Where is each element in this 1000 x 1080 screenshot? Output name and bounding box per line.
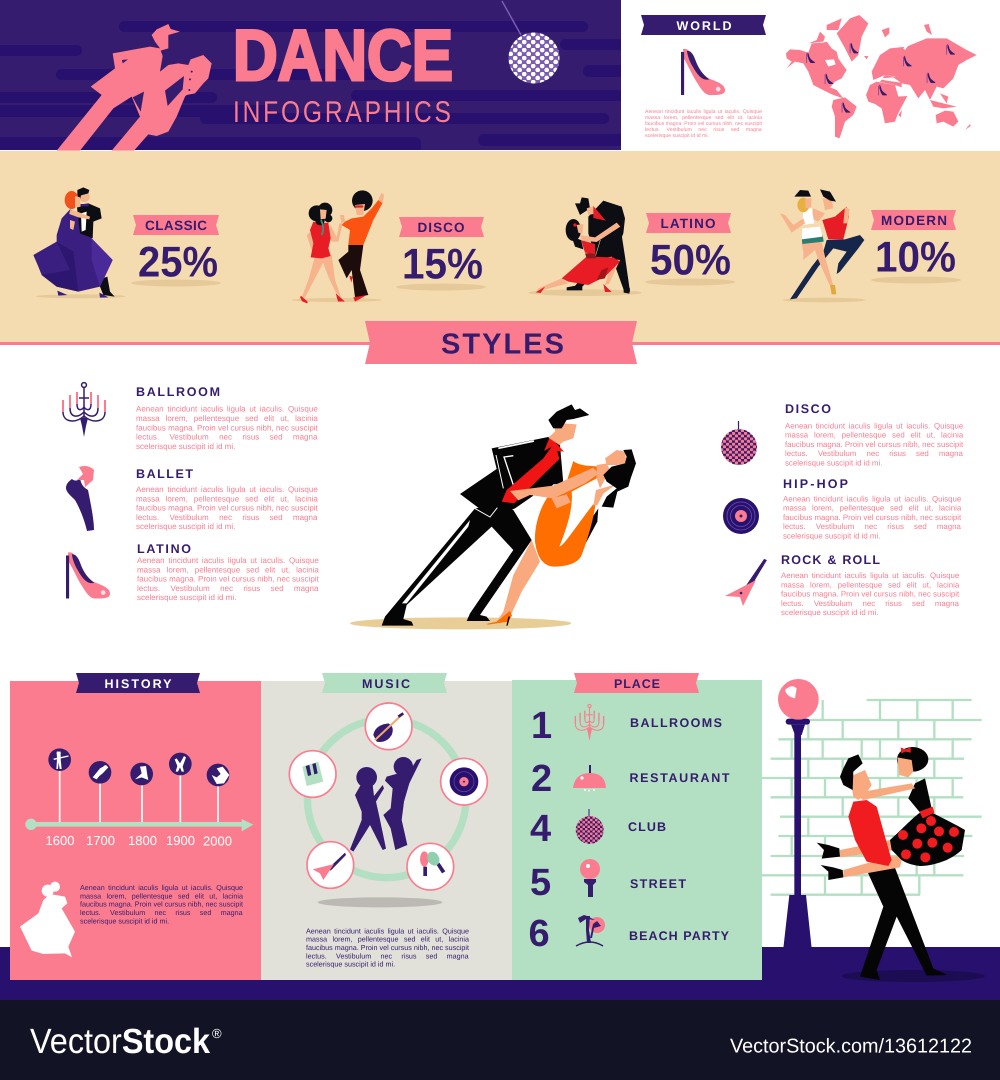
history text: faucibus magna. Proin vel cursus nibh, nec suscipit — [80, 900, 243, 909]
disco text: Aenean tincidunt iaculis ligula ut iaculis. Quisque — [785, 421, 964, 430]
watermark logo: VectorStock — [30, 1022, 210, 1061]
history text — [80, 883, 243, 925]
modern label: 10% — [875, 234, 956, 282]
music text: faucibus magna. Proin vel cursus nibh, nec suscipit — [306, 943, 469, 952]
styles heading ribbon — [365, 321, 637, 364]
hip-hop text: lectus. Vestibulum nec risus sed magna — [783, 522, 961, 531]
ballroom text — [136, 385, 319, 451]
timeline labels: 1800 — [128, 833, 157, 848]
row: restaurant: RESTAURANT — [630, 771, 730, 785]
disco text: faucibus magna. Proin vel cursus nibh, nec suscipit — [785, 440, 964, 449]
disco label — [396, 217, 486, 290]
timeline labels: 1600 — [46, 833, 74, 848]
disco text: DISCO — [785, 402, 831, 416]
illustration: rock and roll couple — [817, 747, 985, 982]
timeline labels: 2000 — [203, 834, 232, 848]
latino text: massa lorem, pellentesque sed elit ut, lacinia — [137, 565, 319, 574]
classic label: CLASSIC — [145, 218, 207, 233]
subtitle: INFOGRAPHICS — [233, 96, 454, 129]
world map — [786, 15, 977, 138]
row: beach party: 6 — [528, 913, 550, 955]
icon: vinyl record — [723, 498, 759, 534]
timeline labels: 1900 — [166, 833, 195, 848]
latino label: LATINO — [660, 216, 716, 231]
history ribbon — [76, 673, 200, 693]
header banner — [0, 0, 633, 157]
panel: style shares band — [0, 151, 1000, 345]
disco label: 15% — [402, 240, 483, 288]
timeline — [25, 748, 253, 831]
hip-hop text: faucibus magna. Proin vel cursus nibh, nec suscipit — [783, 513, 962, 522]
rock and roll text: faucibus magna. Proin vel cursus nibh, nec suscipit — [781, 590, 960, 599]
latino text: faucibus magna. Proin vel cursus nibh, nec suscipit — [137, 575, 320, 584]
brick wall — [762, 700, 982, 895]
panel: music — [261, 673, 512, 980]
row: street: 5 — [530, 862, 551, 904]
disco ball — [502, 1, 560, 84]
disco label: DISCO — [418, 220, 464, 235]
latino text: lectus. Vestibulum nec risus sed magna — [137, 584, 319, 593]
disco text: lectus. Vestibulum nec risus sed magna — [785, 449, 963, 458]
instrument ring diagram — [289, 703, 487, 907]
world text: scelerisque suscipit id id mi. — [645, 133, 709, 139]
figure: disco couple — [292, 190, 384, 303]
hip-hop text — [783, 477, 962, 540]
icon: high heel — [681, 49, 725, 95]
rock and roll text: scelerisque suscipit id id mi. — [781, 608, 878, 617]
rock and roll text: lectus. Vestibulum nec risus sed magna — [781, 599, 959, 608]
ballet text: lectus. Vestibulum nec risus sed magna — [136, 513, 318, 522]
item: ballet — [66, 466, 319, 531]
world text: faucibus magna. Proin vel cursus nibh, nec suscipit — [645, 121, 763, 127]
history text: scelerisque suscipit id id mi. — [80, 916, 169, 925]
music text: lectus. Vestibulum nec risus sed magna — [306, 951, 469, 960]
ground band — [0, 947, 1000, 1000]
figure: latino couple — [528, 197, 642, 296]
rock and roll text — [781, 553, 960, 617]
history text: massa lorem, pellentesque sed elit ut, lacinia — [80, 891, 243, 900]
ballroom text: lectus. Vestibulum nec risus sed magna — [136, 433, 318, 442]
item: ballroom — [62, 383, 319, 451]
world ribbon: WORLD — [676, 19, 732, 33]
ballet text: faucibus magna. Proin vel cursus nibh, nec suscipit — [136, 504, 319, 513]
row: ballrooms — [531, 704, 722, 747]
row: beach party: BEACH PARTY — [629, 929, 730, 943]
panel: place — [512, 673, 762, 980]
rock and roll text: Aenean tincidunt iaculis ligula ut iaculis. Quisque — [781, 571, 960, 580]
ballroom text: Aenean tincidunt iaculis ligula ut iaculis. Quisque — [136, 405, 318, 414]
row: ballrooms: 1 — [531, 705, 552, 747]
ballroom text: scelerisque suscipit id id mi. — [136, 442, 235, 451]
icon: piano keys — [302, 762, 323, 786]
row: street: STREET — [630, 877, 686, 891]
timeline labels: 1700 — [86, 833, 115, 848]
item: disco — [721, 402, 964, 468]
street lamp — [778, 679, 819, 948]
row: street — [530, 859, 686, 904]
ballet text: scelerisque suscipit id id mi. — [136, 522, 235, 531]
ballet text: massa lorem, pellentesque sed elit ut, lacinia — [136, 494, 318, 503]
row: ballrooms: BALLROOMS — [630, 716, 722, 730]
disco text: scelerisque suscipit id id mi. — [785, 458, 882, 468]
latino text — [137, 542, 320, 602]
rock and roll text: massa lorem, pellentesque sed elit ut, lacinia — [781, 580, 960, 589]
music ribbon — [322, 673, 447, 693]
disco text: massa lorem, pellentesque sed elit ut, lacinia — [785, 431, 964, 440]
hip-hop text: HIP-HOP — [783, 477, 848, 491]
row: club: 4 — [530, 808, 551, 850]
modern label: MODERN — [881, 213, 947, 228]
row: restaurant: 2 — [531, 758, 552, 800]
styles heading ribbon: STYLES — [441, 328, 564, 360]
world text — [645, 109, 763, 139]
world text: massa lorem, pellentesque sed elit ut, lacinia — [645, 115, 762, 121]
latino label: 50% — [650, 236, 731, 284]
ballet text: BALLET — [136, 467, 193, 481]
ballroom text: faucibus magna. Proin vel cursus nibh, nec suscipit — [136, 423, 319, 432]
ballroom text: massa lorem, pellentesque sed elit ut, lacinia — [136, 414, 318, 423]
latino text: Aenean tincidunt iaculis ligula ut iaculis. Quisque — [137, 556, 319, 565]
world text: Aenean tincidunt iaculis ligula ut iaculis. Quisque — [645, 109, 762, 115]
modern label — [871, 210, 961, 284]
silhouette couple — [57, 24, 212, 151]
ballet text: Aenean tincidunt iaculis ligula ut iaculis. Quisque — [136, 485, 318, 494]
history text: Aenean tincidunt iaculis ligula ut iaculis. Quisque — [80, 883, 243, 892]
figure: classic couple — [33, 187, 126, 298]
latino text: scelerisque suscipit id id mi. — [137, 593, 236, 602]
icon: maracas — [420, 849, 445, 876]
music ribbon: MUSIC — [362, 677, 410, 691]
ballroom text: BALLROOM — [136, 385, 220, 399]
latino label — [645, 213, 735, 286]
classic label — [131, 215, 221, 286]
illustration: central dancing couple — [350, 404, 636, 629]
title: DANCE — [233, 16, 453, 96]
world text: lectus. Vestibulum nec risus sed magna — [645, 127, 762, 133]
image id: VectorStock.com/13612122 — [730, 1036, 972, 1058]
history ribbon: HISTORY — [104, 677, 172, 691]
music text — [306, 926, 469, 969]
hip-hop text: massa lorem, pellentesque sed elit ut, lacinia — [783, 504, 962, 513]
place ribbon: PLACE — [614, 677, 660, 691]
icon: violin — [373, 713, 403, 742]
history text: lectus. Vestibulum nec risus sed magna — [80, 908, 243, 917]
ballet text — [136, 467, 319, 531]
timeline labels — [46, 833, 232, 848]
rock and roll text: ROCK & ROLL — [781, 553, 880, 567]
item: rock and roll — [725, 553, 960, 617]
disco text — [785, 402, 964, 468]
registered mark: ® — [212, 1026, 222, 1041]
row: restaurant — [531, 758, 730, 800]
dancer silhouette — [20, 882, 75, 957]
row: club: CLUB — [628, 820, 666, 834]
footer watermark bar — [0, 1000, 1000, 1080]
latino text: LATINO — [137, 542, 191, 556]
hip-hop text: Aenean tincidunt iaculis ligula ut iaculis. Quisque — [783, 494, 962, 503]
panel: history — [10, 673, 261, 980]
music text: scelerisque suscipit id id mi. — [306, 960, 395, 969]
icon: disco ball — [721, 421, 757, 465]
icon: flying-v guitar — [725, 559, 767, 606]
icon: high heel — [66, 552, 110, 598]
music text: Aenean tincidunt iaculis ligula ut iaculis. Quisque — [306, 926, 469, 935]
row: beach party — [528, 913, 730, 955]
icon: ballet shoe — [66, 466, 94, 531]
figure: modern couple — [780, 189, 866, 302]
classic label: 25% — [138, 238, 218, 286]
item: hip-hop — [723, 477, 962, 540]
row: club — [530, 808, 666, 850]
music text: massa lorem, pellentesque sed elit ut, lacinia — [306, 935, 469, 944]
icon: chandelier — [62, 383, 106, 437]
item: latino — [66, 542, 320, 602]
icon: vinyl — [450, 767, 478, 796]
icon: flying-v guitar — [313, 853, 346, 880]
place ribbon — [574, 673, 699, 693]
hip-hop text: scelerisque suscipit id id mi. — [783, 532, 880, 540]
panel: world — [641, 15, 977, 139]
world ribbon — [641, 15, 766, 35]
